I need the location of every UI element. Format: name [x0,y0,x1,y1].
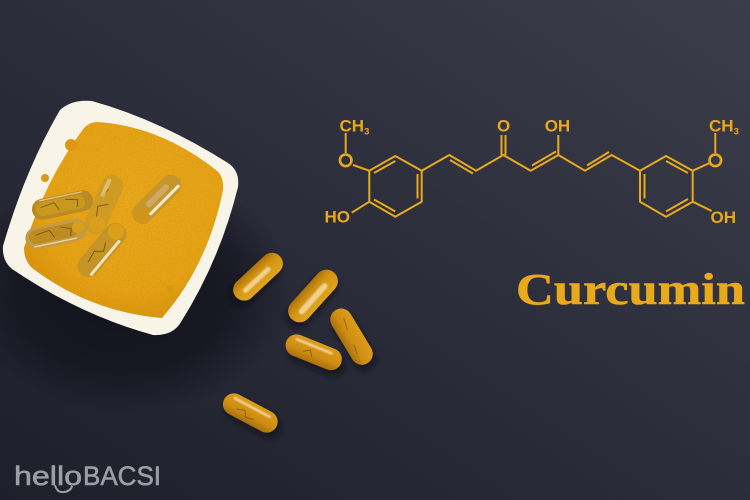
bowl capsule 1 [30,188,95,222]
oxygen atom left [340,154,352,166]
label CH3 left: CH [340,117,364,136]
right benzene ring [640,156,693,217]
capsules scattered on the table [219,248,379,442]
bowl capsule 3 [81,171,127,238]
title: Curcumin: Curcumin [516,265,745,314]
molecule atom labels [324,117,739,227]
bowl capsule 2 [23,217,89,251]
label OH middle: OH [545,117,570,136]
capsules in the bowl [23,170,186,282]
white square bowl with turmeric powder [0,101,290,415]
label CH3 left: 3 [364,127,369,138]
table capsule B [283,265,343,327]
bowl capsule 4 [73,218,131,282]
label OH right: OH [710,208,736,227]
label O carbonyl: O [497,117,510,136]
table capsule E [219,389,282,437]
capsule shadows [221,252,379,442]
logo: helloBACSI [14,461,161,492]
substituent bonds [346,133,715,213]
label CH3 right: 3 [734,127,739,138]
curcumin molecular structure [340,133,721,217]
label HO left: HO [324,208,350,227]
oxygen atom right [710,154,721,166]
logo: helloBACSI: BACSI [83,461,161,491]
bowl capsule 5 [128,170,186,228]
table capsule D [282,331,345,374]
logo: helloBACSI: hello [14,461,82,491]
carbon chain [422,152,640,174]
table capsule A [229,248,287,305]
table capsule C [326,304,377,369]
left benzene ring [369,156,422,217]
label CH3 right: CH [709,117,734,136]
